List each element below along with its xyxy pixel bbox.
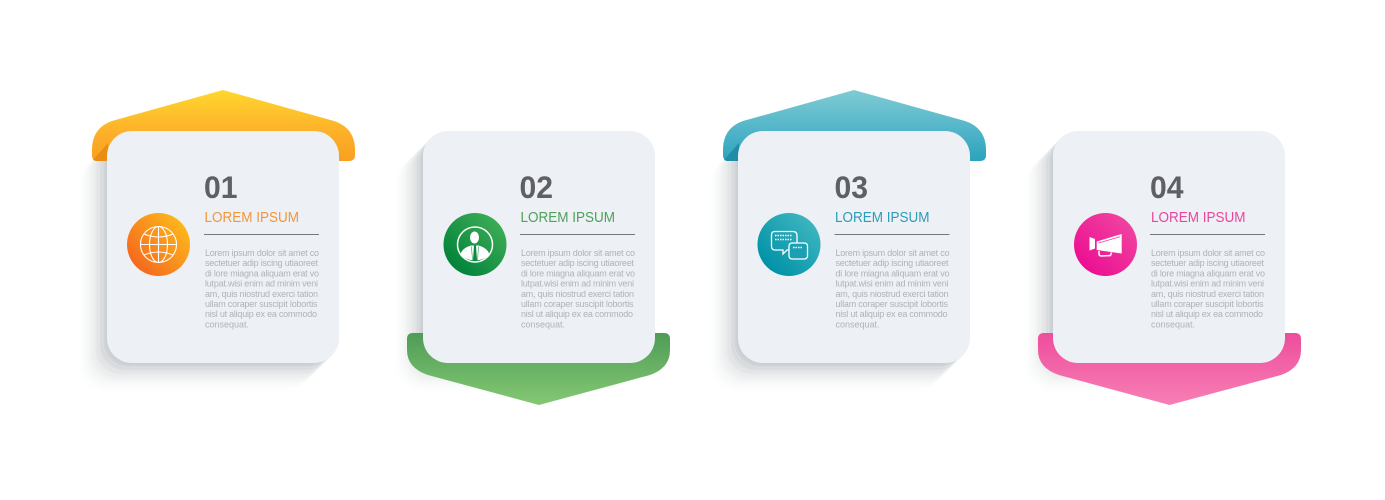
text block 03: ullam coraper suscipit lobortis — [836, 299, 948, 309]
text block 04: sectetuer adip iscing utiaoreet — [1151, 258, 1264, 268]
text block 04: nisl ut aliquip ex ea commodo — [1151, 309, 1263, 319]
heading 03: LOREM IPSUM — [835, 210, 930, 226]
shadow: stacked sheets 01 — [79, 133, 337, 391]
text block 02: di lore miagna aliquam erat vo — [521, 268, 635, 278]
shadow: stacked sheets 02 — [395, 133, 653, 391]
text block 04: lutpat.wisi enim ad minim veni — [1151, 279, 1264, 289]
text block 02: nisl ut aliquip ex ea commodo — [521, 309, 633, 319]
text block 03: Lorem ipsum dolor sit amet co — [836, 248, 950, 258]
text block 02: am, quis niostrud exerci tation — [521, 289, 634, 299]
number 01: 01 — [204, 169, 238, 205]
text block 04 — [1151, 248, 1265, 329]
blue tab — [723, 90, 986, 161]
tab fold — [93, 143, 108, 161]
panel: card 01 — [79, 90, 355, 391]
text block 01: di lore miagna aliquam erat vo — [205, 268, 319, 278]
text block 03: sectetuer adip iscing utiaoreet — [836, 258, 949, 268]
shadow: stacked sheets 03 — [710, 133, 968, 391]
panel: card 02 — [395, 131, 670, 405]
text block 01: consequat. — [205, 319, 249, 329]
text block 04: am, quis niostrud exerci tation — [1151, 289, 1264, 299]
text block 03: lutpat.wisi enim ad minim veni — [836, 279, 948, 289]
shadow: stacked sheets 04 — [1025, 133, 1283, 391]
text block 03: am, quis niostrud exerci tation — [836, 289, 948, 299]
text block 01: nisl ut aliquip ex ea commodo — [205, 309, 317, 319]
icon: speech bubbles — [758, 213, 820, 276]
icon: globe — [127, 213, 190, 276]
text block 03: consequat. — [836, 319, 880, 329]
panel: card 04 — [1025, 131, 1301, 405]
text block 01: lutpat.wisi enim ad minim veni — [205, 279, 318, 289]
text block 03: nisl ut aliquip ex ea commodo — [836, 309, 948, 319]
text block 02: ullam coraper suscipit lobortis — [521, 299, 634, 309]
text block 01: am, quis niostrud exerci tation — [205, 289, 318, 299]
text block 02 — [521, 248, 635, 329]
text block 04: consequat. — [1151, 319, 1195, 329]
text block 03: di lore miagna aliquam erat vo — [836, 268, 950, 278]
text block 03 — [836, 248, 950, 329]
text block 02: sectetuer adip iscing utiaoreet — [521, 258, 634, 268]
icon: businessman — [444, 213, 506, 276]
card face — [423, 131, 655, 363]
panel: card 03 — [710, 90, 986, 391]
tab fold — [724, 143, 739, 161]
text block 01 — [205, 248, 319, 329]
heading 04: LOREM IPSUM — [1151, 210, 1246, 226]
text block 02: Lorem ipsum dolor sit amet co — [521, 248, 635, 258]
text block 01: ullam coraper suscipit lobortis — [205, 299, 318, 309]
orange tab — [92, 90, 355, 161]
text block 01: sectetuer adip iscing utiaoreet — [205, 258, 318, 268]
icon: megaphone — [1074, 213, 1137, 276]
number 02: 02 — [520, 169, 553, 205]
card face — [1053, 131, 1285, 363]
card face — [107, 131, 339, 363]
text block 04: di lore miagna aliquam erat vo — [1151, 268, 1265, 278]
text block 04: Lorem ipsum dolor sit amet co — [1151, 248, 1265, 258]
number 03: 03 — [834, 169, 868, 205]
heading 01: LOREM IPSUM — [204, 210, 299, 226]
text block 02: lutpat.wisi enim ad minim veni — [521, 279, 634, 289]
pink tab — [1038, 333, 1301, 405]
text block 04: ullam coraper suscipit lobortis — [1151, 299, 1264, 309]
text block 01: Lorem ipsum dolor sit amet co — [205, 248, 319, 258]
green tab — [407, 333, 670, 405]
heading 02: LOREM IPSUM — [520, 210, 615, 226]
number 04: 04 — [1150, 169, 1184, 205]
card face — [738, 131, 970, 363]
text block 02: consequat. — [521, 319, 565, 329]
